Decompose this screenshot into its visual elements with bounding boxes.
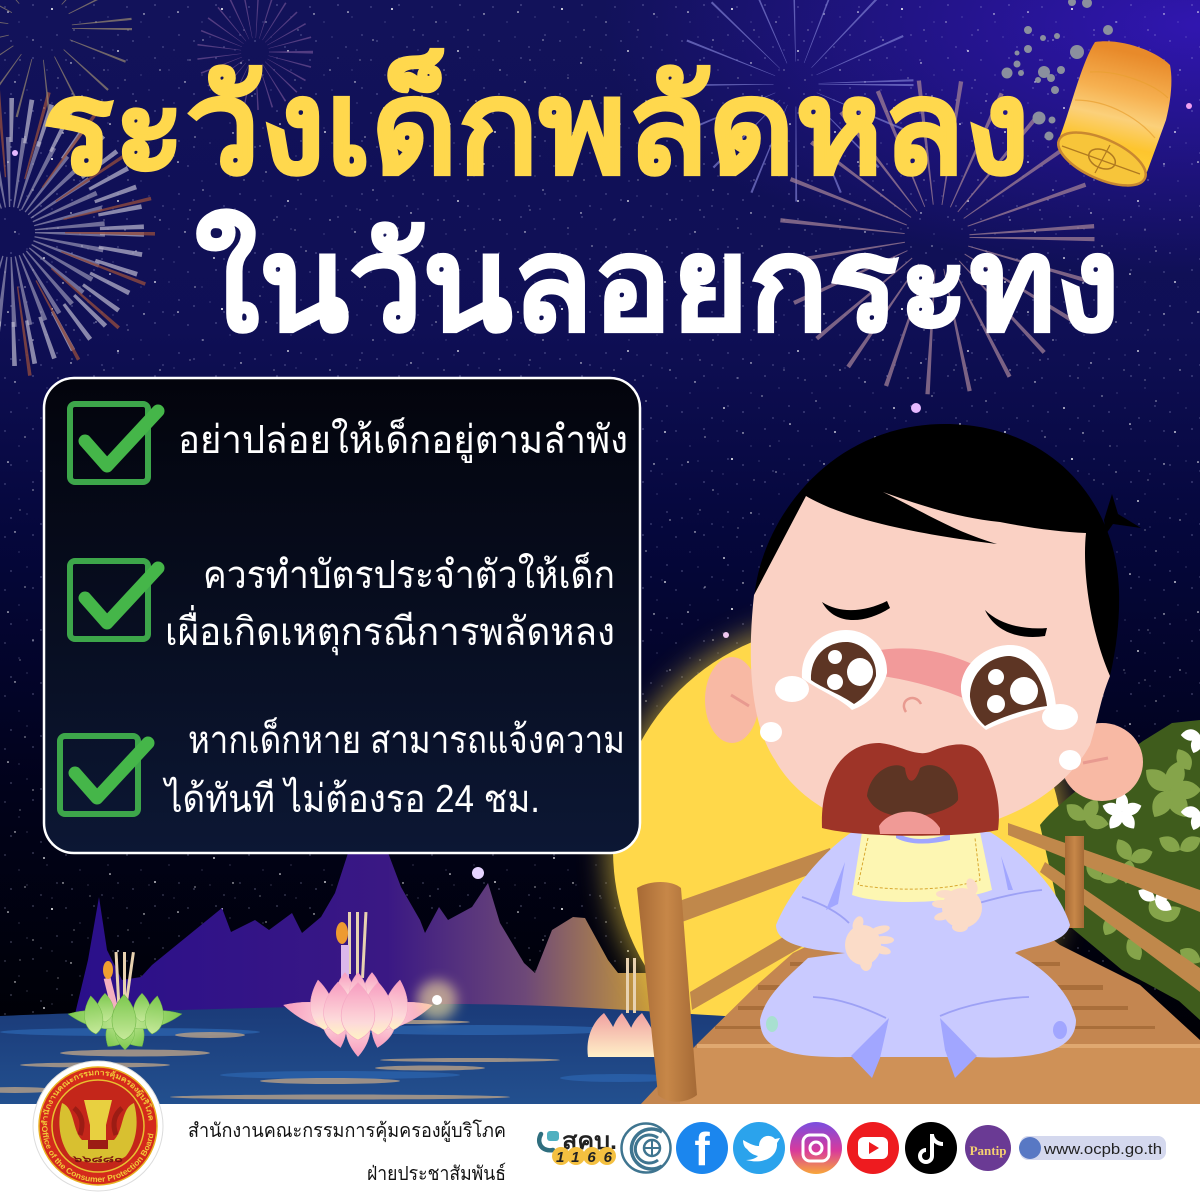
hair: [754, 424, 1119, 676]
river: [0, 1004, 760, 1105]
hair tuft: [1104, 494, 1141, 534]
feet: [851, 1018, 889, 1078]
logo: consumer protection board seal: สำนักงานคณะกรรมการคุ้มครองผู้บริโภค: [40, 1070, 153, 1126]
website pill: www.ocpb.go.th: [1043, 1141, 1162, 1158]
left ear: [705, 657, 759, 743]
krathong: green lotus: [67, 952, 183, 1053]
mouth: [822, 743, 999, 836]
bridge fence: right rails: [1008, 823, 1200, 992]
wooden bridge deck: [640, 915, 1200, 1105]
tears: [760, 676, 1081, 770]
bush with white flowers: [1040, 720, 1200, 1020]
website pill: [1019, 1136, 1166, 1160]
small glowing stars: [12, 103, 1192, 879]
footer organisation name: ฝ่ายประชาสัมพันธ์: [367, 1162, 506, 1185]
body: [760, 832, 1076, 1058]
icon: tiktok: [905, 1122, 957, 1174]
icon: OCPB logo: [622, 1124, 670, 1172]
title line 2: ในวันลอยกระทง: [195, 209, 1120, 358]
blush band: [880, 648, 972, 700]
panel: safety tips: [44, 378, 640, 853]
fireworks: [0, 0, 1113, 344]
eyebrows: [822, 601, 890, 620]
icon: facebook: [676, 1122, 728, 1175]
baby character: [705, 424, 1143, 1078]
footer organisation name: สำนักงานคณะกรรมการคุ้มครองผู้บริโภค: [188, 1119, 506, 1143]
icon: checkbox 1: [70, 404, 158, 482]
firework: small purple burst: [219, 16, 291, 88]
icon: pantip: [965, 1125, 1011, 1171]
firework: mauve burst: [842, 142, 1032, 332]
right hand: [932, 877, 982, 932]
icon: youtube: [847, 1122, 899, 1174]
temple silhouette and purple sky: [75, 850, 700, 1030]
light orb on water: [417, 980, 457, 1020]
icon: pantip: Pantip: [970, 1143, 1006, 1158]
icon: checkbox 3: [60, 736, 148, 814]
bib: [852, 832, 992, 902]
left eye: [802, 630, 887, 710]
footer organisation name: [188, 1119, 506, 1185]
firework: large left burst: [0, 120, 122, 344]
panel: safety tips: ได้ทันที ไม่ต้องรอ 24 ชม.: [162, 777, 540, 821]
nose: [904, 698, 921, 712]
hotline logo: 1166: [556, 1149, 613, 1166]
icon: instagram: [790, 1122, 842, 1174]
tip 2 text: ควรทำบัตรประจำตัวให้เด็ก: [203, 551, 615, 597]
white flowers: [1101, 729, 1200, 915]
logo: consumer protection board seal: Office of the Consumer Protection Board: [42, 1126, 154, 1182]
moon: [613, 625, 1063, 1075]
title line 1: ระวังเด็กพลัดหลง: [42, 48, 1030, 201]
footer band: [0, 1104, 1200, 1200]
firework: blue burst: [726, 14, 866, 154]
icon: facebook: f: [694, 1123, 710, 1175]
tip 1 text: อย่าปล่อยให้เด็กอยู่ตามลำพัง: [178, 416, 628, 463]
logo: consumer protection board seal: [32, 1060, 164, 1192]
panel: safety tips: เผื่อเกิดเหตุกรณีการพลัดหลง: [165, 605, 615, 656]
face: [751, 492, 1110, 833]
left hand: [845, 915, 894, 971]
firework: top left burst: [0, 0, 102, 90]
logo: consumer protection board seal: ๖๖๘๘๐: [71, 1154, 124, 1164]
moon glow: [606, 618, 1070, 1082]
hotline logo: [539, 1128, 617, 1166]
hotline logo: สคบ.: [562, 1128, 617, 1155]
icon: twitter: [733, 1122, 785, 1174]
krathong: pink lotus: [281, 912, 435, 1057]
clothing folds: [802, 890, 1042, 1018]
bridge fence: left post and rails: [637, 848, 835, 1102]
sky lantern: [1051, 41, 1171, 196]
firework: dotted burst: [1002, 0, 1113, 140]
krathong: third lotus: [587, 958, 660, 1057]
icon: checkbox 2: [70, 561, 158, 639]
right ear: [1061, 723, 1143, 801]
right eye: [961, 645, 1056, 730]
tip 3 text: หากเด็กหาย สามารถแจ้งความ: [188, 716, 625, 762]
